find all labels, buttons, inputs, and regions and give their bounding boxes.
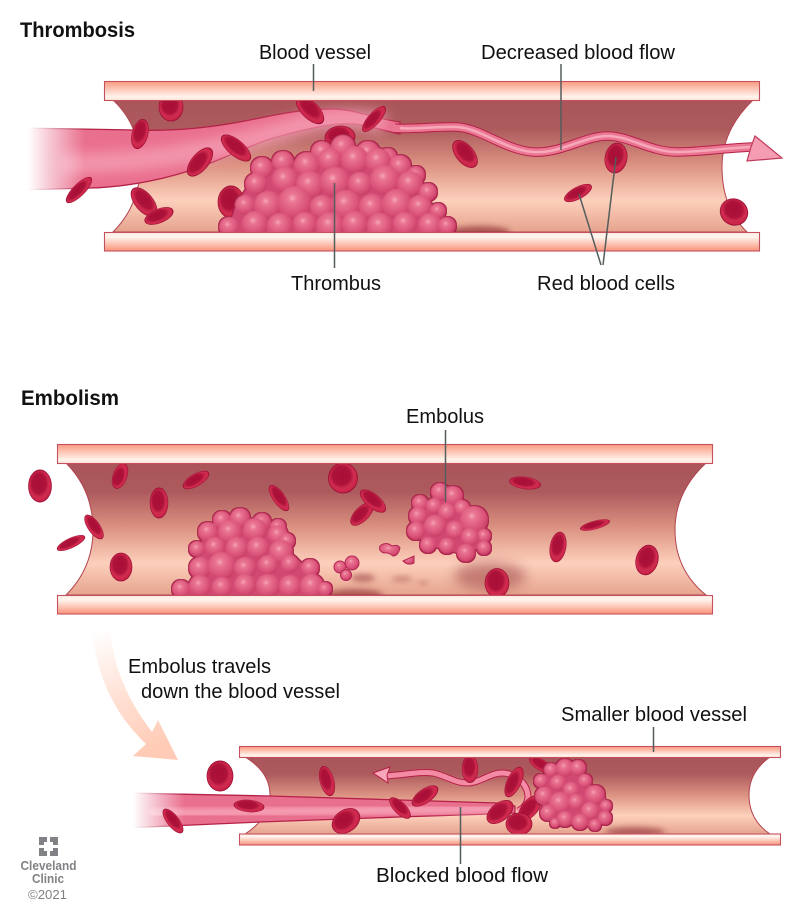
logo: Cleveland Clinic: ©2021 [28, 888, 67, 902]
illustration: thrombosis vessel [10, 82, 782, 251]
embolus clot [407, 483, 491, 562]
vessel wall: bottom [240, 834, 780, 845]
label: Blood vessel [259, 42, 371, 91]
illustration: smaller blood vessel [118, 746, 780, 845]
logo: Cleveland Clinic: Clinic [32, 871, 64, 886]
label: Embolus [406, 406, 484, 502]
label: Embolus travels down the blood vessel: down the blood vessel [141, 681, 340, 703]
label: Red blood cells: Red blood cells [537, 273, 675, 295]
blood flow stream [10, 109, 782, 198]
embolus fragments [334, 544, 414, 580]
thrombus clot [219, 135, 456, 240]
label: Blocked blood flow: Blocked blood flow [376, 865, 549, 887]
vessel wall: bottom [58, 596, 712, 614]
label: Decreased blood flow: Decreased blood flow [481, 42, 676, 64]
vessel wall: bottom [104, 232, 760, 251]
label: Red blood cells [537, 157, 675, 295]
vessel lumen [66, 463, 706, 595]
red blood cells: thrombosis [63, 92, 753, 230]
vessel lumen [113, 100, 753, 232]
vessel wall: top [104, 82, 760, 100]
title: Embolism: Embolism [21, 387, 119, 410]
arrow: embolus travel direction [92, 630, 178, 760]
vessel wall: top [58, 444, 712, 464]
label: Thrombus [291, 183, 381, 295]
embolus lodged in vessel [534, 759, 612, 831]
thrombus clot [172, 508, 332, 600]
vessel lumen [245, 757, 770, 834]
label: Embolus travels down the blood vessel [128, 656, 340, 703]
label: Blood vessel: Blood vessel [259, 42, 371, 64]
label: Thrombus: Thrombus [291, 273, 381, 295]
red blood cells: smaller vessel [159, 754, 555, 839]
red blood cells: embolism [28, 461, 662, 598]
clot shadows [327, 562, 526, 601]
illustration: embolism vessel [28, 444, 712, 614]
thrombus shadow [456, 222, 512, 232]
blocked blood flow stream [118, 788, 515, 834]
label: Embolus travels down the blood vessel: Embolus travels [128, 656, 271, 678]
logo: Cleveland Clinic [20, 837, 77, 902]
icon: Cleveland Clinic cross [39, 837, 58, 856]
logo: Cleveland Clinic: Cleveland [20, 858, 77, 873]
clot shadow [605, 827, 665, 837]
vessel wall: top [240, 746, 780, 758]
label: Smaller blood vessel: Smaller blood vessel [561, 704, 747, 726]
title: Thrombosis: Thrombosis [20, 19, 135, 42]
label: Embolus: Embolus [406, 406, 484, 428]
returning thin flow with arrow [373, 767, 528, 811]
